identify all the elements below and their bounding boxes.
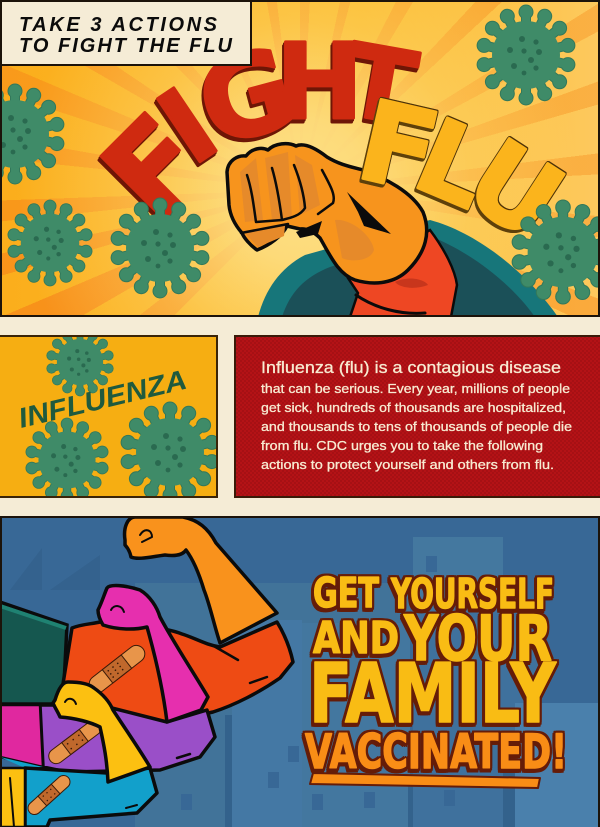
arm: orange: [125, 517, 277, 643]
word FIGHT: F: [76, 88, 235, 248]
word FIGHT: I: [138, 65, 238, 188]
headline underline: [310, 773, 540, 788]
title box: [1, 1, 251, 65]
influenza label: INFLUENZA: [15, 364, 190, 434]
panel: flu description: [234, 335, 600, 498]
title text: TO FIGHT THE FLU: [19, 35, 233, 57]
arm: red with bandage: [62, 622, 293, 722]
virus over F: [111, 198, 209, 298]
word FIGHT: [76, 21, 424, 248]
arm: purple with bandage: [40, 705, 215, 772]
red sleeve: [348, 230, 457, 317]
wrist shadow: [296, 192, 391, 238]
panel: get vaccinated: [0, 516, 600, 827]
arm: yellow: [53, 682, 150, 782]
bandage on red arm: [86, 642, 148, 696]
fist shading: [240, 152, 374, 260]
headline: get yourself and your family vaccinated: GET: [313, 569, 379, 617]
word FLU: U: [446, 116, 584, 264]
virus lower left: [8, 200, 92, 286]
fist and arm: [227, 144, 427, 283]
description text: that can be serious. Every year, millions of people: [261, 381, 570, 396]
city skyline background: [10, 537, 600, 827]
virus top right: [477, 4, 575, 106]
finger creases: [241, 165, 334, 233]
word FIGHT: G: [185, 23, 308, 172]
yellow sleeve: [0, 768, 25, 827]
virus top: [46, 328, 114, 396]
headline: get yourself and your family vaccinated: YOUR: [403, 602, 552, 675]
word FIGHT: H: [276, 21, 363, 143]
word FLU: [347, 77, 584, 264]
description text: get sick, hundreds of thousands are hospitalized,: [261, 400, 566, 415]
pink sleeve: [0, 705, 43, 767]
description text: actions to protect yourself and others from flu.: [261, 457, 554, 472]
virus bottom right: [121, 402, 219, 502]
description text: Influenza (flu) is a contagious disease: [261, 359, 561, 377]
title text: TAKE 3 ACTIONS: [19, 14, 218, 36]
virus top left: [0, 84, 64, 184]
bandage on blue arm: [25, 773, 73, 817]
title text: [19, 14, 233, 57]
word FIGHT: T: [337, 21, 424, 148]
bandage on purple arm: [46, 717, 104, 767]
panel: influenza viruses: [0, 335, 218, 498]
panel: hero fight flu: [0, 0, 600, 317]
headline: get yourself and your family vaccinated: AND: [313, 613, 399, 664]
arm: blue with bandage: [0, 757, 157, 827]
word FLU: F: [347, 77, 450, 219]
arm: pink: [98, 586, 208, 722]
description text: from flu. CDC urges you to take the following: [261, 438, 543, 453]
word FLU: L: [399, 95, 508, 233]
arm: dark green shirt: [0, 602, 67, 704]
description text: and thousands to tens of thousands of people die: [261, 419, 572, 434]
headline: get yourself and your family vaccinated: [305, 569, 567, 780]
description text: [261, 359, 572, 472]
virus lower right: [512, 199, 600, 305]
virus bottom left: [26, 418, 108, 502]
superhero body and cape: [258, 220, 558, 317]
